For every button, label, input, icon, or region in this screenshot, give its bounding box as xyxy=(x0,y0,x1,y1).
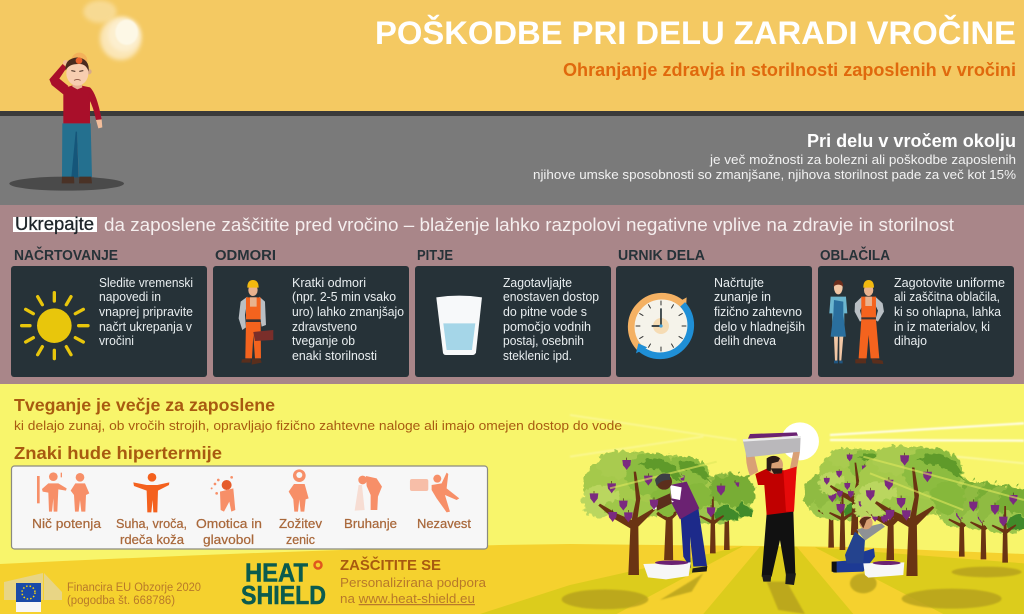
logo: European Commission xyxy=(4,573,62,612)
symptom labels: Nezavest xyxy=(417,516,471,531)
text: EU funding xyxy=(67,582,201,607)
icon: clock xyxy=(631,296,691,356)
text: planning: vnaprej pripravite xyxy=(99,305,193,319)
text: planning: vročini xyxy=(99,334,134,348)
symptom labels xyxy=(32,516,471,547)
heading: planning: NAČRTOVANJE xyxy=(14,246,118,264)
text: work schedule: delo v hladnejših xyxy=(714,320,805,334)
text: work schedule: zunanje in xyxy=(714,290,771,304)
text: drinking: steklenic ipd. xyxy=(503,349,572,363)
text: protect yourself xyxy=(340,556,486,606)
text block: working in hot environment: Pri delu v vročem okolju xyxy=(807,131,1016,151)
icon: no sweating xyxy=(37,472,89,512)
text: breaks xyxy=(292,276,404,363)
figure: man with heat stress xyxy=(9,53,124,191)
panel: planning xyxy=(11,246,207,377)
text: breaks: Kratki odmori xyxy=(292,276,366,290)
sun glare xyxy=(83,0,141,60)
text: drinking: do pitne vode s xyxy=(503,305,587,319)
panel: drinking xyxy=(415,248,611,377)
subtitle: Ohranjanje zdravja in storilnosti zaposlenih v vročini xyxy=(563,60,1016,80)
text: higher risk: ki delajo zunaj, ob vročih strojih, opravljajo fizično zahtevne naloge ali imajo omejen dostop do vode xyxy=(14,418,622,433)
text: drinking: enostaven dostop xyxy=(503,290,599,304)
icon: vomiting xyxy=(355,476,382,511)
text: protect yourself: ZAŠČITITE SE xyxy=(340,556,441,574)
text: drinking: postaj, osebnih xyxy=(503,334,584,348)
symptom labels: rdeča koža xyxy=(120,532,185,547)
text: planning: Sledite vremenski xyxy=(99,276,193,290)
text block: working in hot environment xyxy=(533,131,1016,182)
symptom labels: Bruhanje xyxy=(344,516,397,531)
text: clothing: in iz materialov, ki xyxy=(894,320,990,334)
panel: clothing xyxy=(818,246,1014,377)
background: road kerb xyxy=(0,111,1024,116)
icon: dizziness and headache xyxy=(211,476,235,512)
text: planning xyxy=(99,276,193,348)
heading: breaks: ODMORI xyxy=(215,248,276,264)
symptom labels: zenic xyxy=(286,532,315,547)
worker: picking grapes xyxy=(650,473,707,573)
text: clothing: ki so ohlapna, lahka xyxy=(894,305,1001,319)
heading: higher risk: Tveganje je večje za zaposlene xyxy=(14,395,275,415)
heading: signs of hyperthermia: Znaki hude hipertermije xyxy=(14,443,222,463)
trees: right row xyxy=(804,470,860,548)
title: POŠKODBE PRI DELU ZARADI VROČINE xyxy=(375,15,1016,51)
icon: worker with toolbox xyxy=(239,280,273,365)
heading: measures: da zaposlene zaščitite pred vročino – blaženje lahko razpolovi negativne vplive na zdravje in storilnost xyxy=(104,215,954,235)
symptom labels: glavobol xyxy=(203,532,254,547)
text: work schedule xyxy=(714,276,805,348)
text: planning: napovedi in xyxy=(99,290,161,304)
background: grey pavement xyxy=(0,116,1024,205)
text: work schedule: delih dneva xyxy=(714,334,776,348)
text block: working in hot environment: je več možnosti za bolezni ali poškodbe zaposlenih xyxy=(709,152,1016,167)
icon: glass of water xyxy=(436,296,482,355)
panel: work schedule xyxy=(616,248,812,377)
icon: constricted pupils xyxy=(289,469,309,512)
symptom labels: Suha, vroča, xyxy=(116,516,187,531)
sky rays xyxy=(570,415,1024,463)
symptom labels: Nič potenja xyxy=(32,516,102,531)
text: clothing xyxy=(894,276,1005,348)
text: breaks: zdravstveno xyxy=(292,320,357,334)
heading: clothing: OBLAČILA xyxy=(820,246,890,264)
symptom labels: Zožitev xyxy=(279,516,323,531)
shadows on the ground xyxy=(562,567,1022,614)
panel background: risk section xyxy=(0,384,1024,614)
crate: picker's crate xyxy=(643,560,691,579)
text: work schedule: fizično zahtevno xyxy=(714,305,802,319)
text: EU funding: (pogodba št. 668786) xyxy=(67,595,175,607)
text: protect yourself: Personalizirana podpora xyxy=(340,576,486,590)
crate: kneeling picker's crate xyxy=(863,561,904,578)
text: clothing: dihajo xyxy=(894,334,927,348)
text: drinking: Zagotavljajte xyxy=(503,276,572,290)
heading: drinking: PITJE xyxy=(417,248,453,264)
text: planning: načrt ukrepanja v xyxy=(99,320,193,334)
panel: symptoms xyxy=(12,466,488,549)
light rays across foliage xyxy=(610,457,1024,510)
logo: Heat-Shield: HEAT xyxy=(245,558,308,588)
trees: left row xyxy=(700,473,755,550)
icon: uniformed woman and worker xyxy=(829,280,884,364)
worker: kneeling xyxy=(832,515,887,573)
text: breaks: tveganje ob xyxy=(292,334,355,348)
text: clothing: Zagotovite uniforme xyxy=(894,276,1005,290)
panel background: measures xyxy=(0,205,1024,384)
text: breaks: uro) lahko zmanjšajo xyxy=(292,305,404,319)
icon: dry red skin xyxy=(133,473,169,512)
panel: breaks xyxy=(213,248,409,377)
heading: measures: Ukrepajte xyxy=(15,214,94,234)
worker: carrying crate xyxy=(743,432,801,585)
text: drinking xyxy=(503,276,599,363)
footer and ground band xyxy=(0,544,1024,614)
background: top heat band xyxy=(0,0,1024,111)
ground stripes xyxy=(480,546,1024,614)
heading: work schedule: URNIK DELA xyxy=(618,248,706,264)
icon: sun xyxy=(22,293,88,359)
text: work schedule: Načrtujte xyxy=(714,276,764,290)
symptom labels: Omotica in xyxy=(196,516,262,531)
text: breaks: enaki storilnosti xyxy=(292,349,377,363)
text: drinking: pomočjo vodnih xyxy=(503,320,591,334)
icon: loss of consciousness xyxy=(410,473,459,512)
text: clothing: ali zaščitna oblačila, xyxy=(894,290,1000,304)
illustration: vineyard harvest xyxy=(480,415,1024,614)
text: protect yourself: na www.heat-shield.eu xyxy=(340,592,475,606)
text: breaks: (npr. 2-5 min vsako xyxy=(292,290,396,304)
logo: Heat-Shield xyxy=(241,558,326,610)
text block: working in hot environment: njihove umske sposobnosti so zmanjšane, njihova storilnost pade za več kot 15% xyxy=(533,167,1016,182)
logo: Heat-Shield: SHIELD xyxy=(241,580,326,610)
text: EU funding: Financira EU Obzorje 2020 xyxy=(67,582,201,594)
